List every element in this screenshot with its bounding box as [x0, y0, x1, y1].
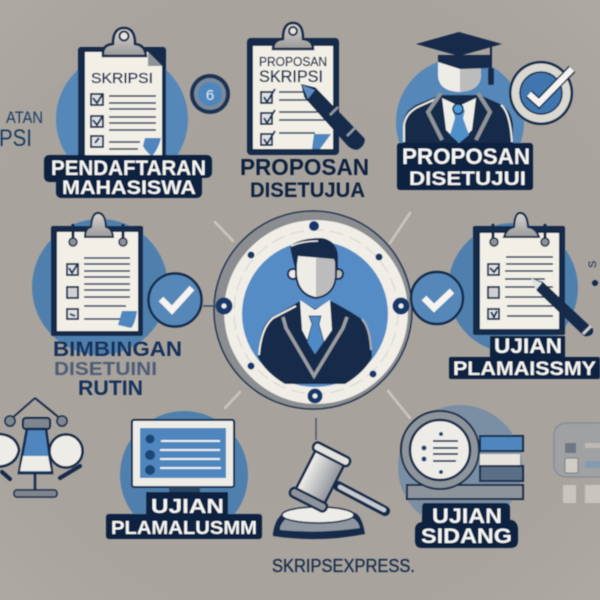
label: proposan disetujua: DISETUJUA — [250, 179, 365, 202]
icon: faded right document — [554, 423, 600, 503]
icon: gavel — [273, 418, 385, 539]
decorative connector strokes — [215, 213, 410, 418]
label: proposan disetujui — [397, 143, 533, 190]
label: proposan disetujui: DISETUJUI — [409, 168, 526, 190]
label: ujian plamaissmy: UJIAN — [494, 335, 562, 358]
label: bimbingan disetuini rutin: DISETUINI — [54, 359, 157, 379]
icon: clipboard proposan skripsi: PROPOSAN — [259, 54, 327, 69]
label: ujian sidang: UJIAN — [432, 505, 502, 528]
label: proposan disetujua: PROPOSAN — [240, 154, 369, 180]
icon: small numbered badge — [190, 74, 230, 114]
connector node — [203, 305, 216, 307]
icon: stacked books — [407, 436, 523, 499]
icon: clipboard skripsi: SKRIPSI — [91, 70, 153, 87]
panel: proposan disetujua — [240, 23, 369, 202]
panel: central figure — [214, 211, 412, 409]
label: bimbingan disetuini rutin: BIMBINGAN — [53, 338, 182, 361]
label: ujian plamalusmm — [106, 492, 262, 539]
icon: graduate figure — [403, 32, 513, 145]
left cropped text fragment: PSI — [0, 125, 32, 152]
icon: document seal — [401, 411, 479, 489]
icon: clipboard skripsi — [78, 28, 166, 159]
footer brand: skripsexpress: SKRIPSEXPRESS. — [272, 556, 415, 576]
blue circle backdrop — [56, 53, 188, 185]
icon: pen — [531, 278, 593, 336]
icon: clipboard checklist — [51, 213, 143, 336]
icon: clipboard proposan skripsi: SKRIPSI — [259, 67, 323, 86]
blue circle backdrop — [398, 405, 522, 529]
label: proposan disetujua — [240, 154, 369, 202]
label: proposan disetujui: PROPOSAN — [402, 144, 530, 169]
blue circle backdrop — [120, 411, 248, 539]
label: ujian plamaissmy — [449, 335, 600, 380]
panel: bimbingan disetujui rutin — [32, 213, 216, 400]
icon: clipboard checklist — [473, 213, 565, 335]
label: pendaftaran mahasiswa — [44, 155, 212, 199]
label: pendaftaran mahasiswa: PENDAFTARAN — [51, 157, 206, 180]
icon: small numbered badge: 6 — [206, 87, 214, 104]
right cropped fragment — [587, 261, 599, 286]
panel: ujian plamaissmy right — [411, 213, 600, 380]
label: pendaftaran mahasiswa: MAHASISWA — [62, 177, 196, 199]
label: ujian plamalusmm: PLAMALUSMM — [111, 517, 257, 538]
panel: pendaftaran mahasiswa — [44, 28, 212, 199]
icon: balance scales — [0, 398, 82, 497]
icon: check badge — [411, 272, 463, 324]
icon: clipboard proposan skripsi — [247, 23, 339, 155]
label: ujian sidang: SIDANG — [421, 525, 512, 548]
label: ujian sidang — [415, 503, 518, 548]
label: bimbingan disetuini rutin: RUTIN — [78, 377, 143, 400]
icon: check badge — [148, 274, 202, 326]
icon: check badge — [509, 61, 573, 125]
panel: proposan disetujui — [396, 32, 573, 190]
left cropped text fragment: ATAN — [6, 108, 43, 127]
right cropped fragment: S — [587, 261, 599, 268]
blue circle backdrop — [32, 219, 168, 355]
label: ujian plamalusmm: UJIAN — [151, 496, 224, 518]
figure: man in suit — [258, 238, 372, 384]
panel: ujian sidang — [398, 405, 523, 548]
blue circle backdrop — [448, 223, 578, 353]
central ring — [214, 211, 412, 409]
ring nodes — [216, 221, 410, 404]
icon: pen — [302, 85, 364, 149]
label: bimbingan disetuini rutin — [53, 338, 182, 400]
left cropped text fragment — [0, 108, 43, 152]
panel: ujian plamalusmm — [106, 411, 262, 539]
label: ujian plamaissmy: PLAMAISSMY — [453, 359, 596, 380]
icon: monitor — [132, 420, 234, 493]
blue circle backdrop — [396, 58, 524, 186]
